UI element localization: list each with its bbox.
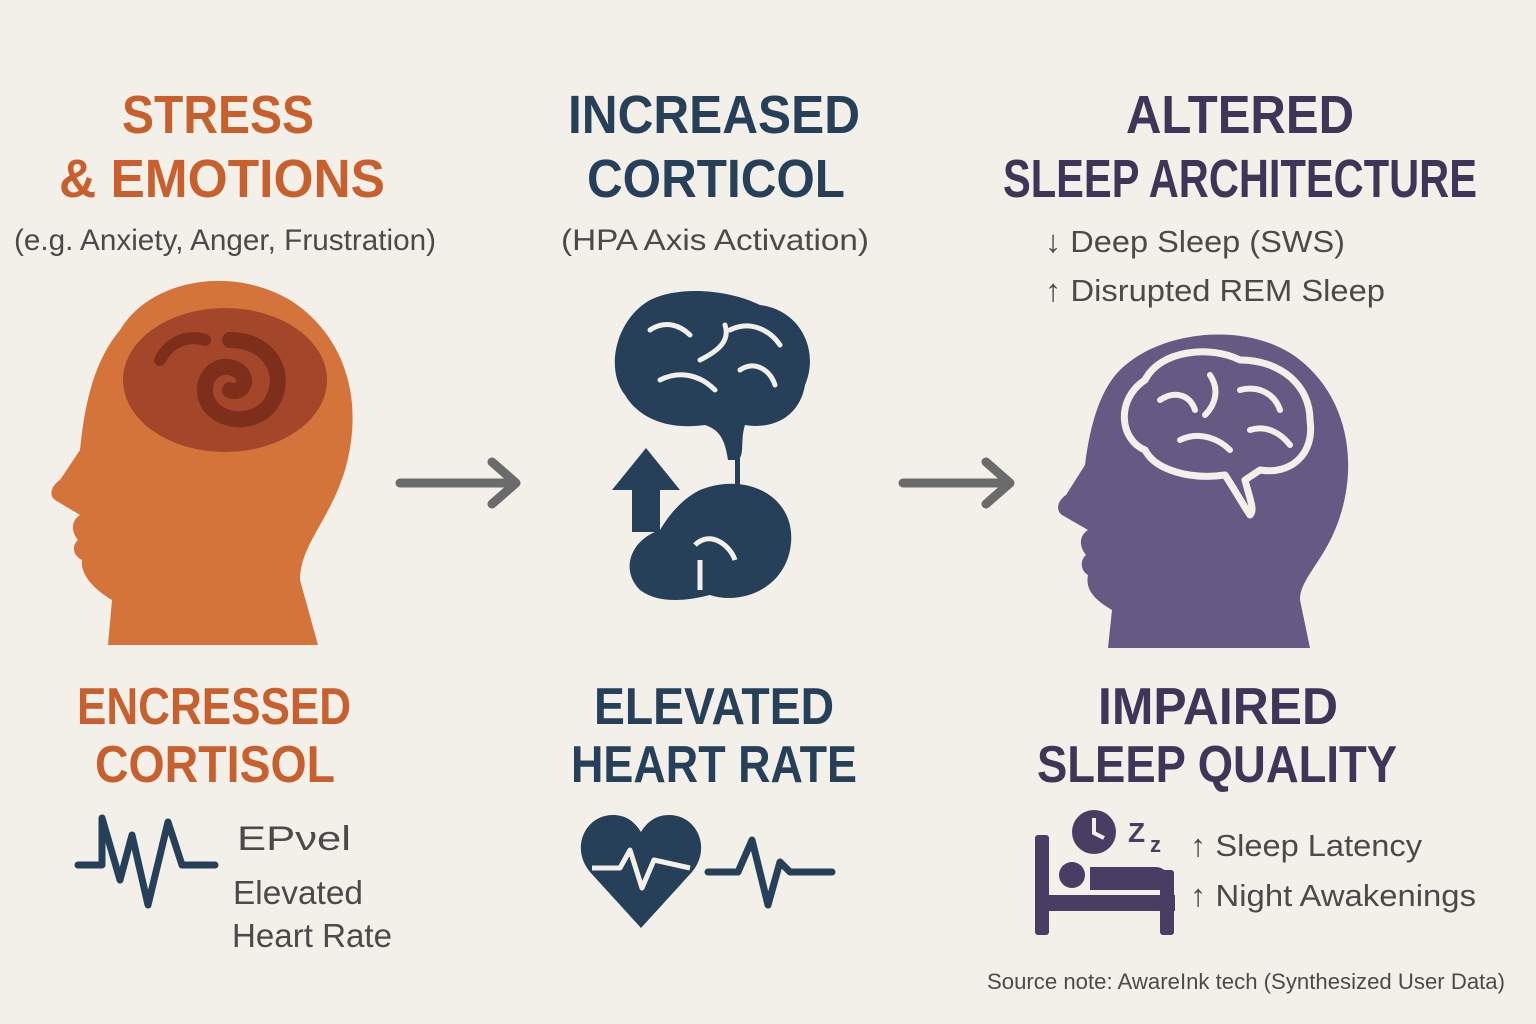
title: altered sleep architecture <box>1003 85 1477 308</box>
icon: bed with clock and Zz: z <box>1150 832 1161 857</box>
title: altered sleep architecture: ALTERED <box>1126 85 1354 145</box>
icon: bed with clock and Zz: Z <box>1128 817 1145 848</box>
heading: encressed cortisol: ENCRESSED <box>77 678 351 736</box>
heading: elevated heart rate: ELEVATED <box>594 678 834 736</box>
heading: elevated heart rate <box>571 678 857 794</box>
heading: elevated heart rate: HEART RATE <box>571 736 857 794</box>
heading: impaired sleep quality: SLEEP QUALITY <box>1037 736 1397 794</box>
heading: encressed cortisol: CORTISOL <box>95 736 335 794</box>
text: elevated heart rate left: Heart Rate <box>232 917 392 954</box>
title: increased corticol <box>561 85 869 257</box>
icon: ECG left <box>78 818 215 905</box>
title: stress & emotions: STRESS <box>122 85 314 145</box>
arrow 1 <box>400 462 516 504</box>
heading: impaired sleep quality: IMPAIRED <box>1098 678 1338 736</box>
text: sleep latency and awakenings <box>1190 828 1476 913</box>
text: elevated heart rate left <box>232 820 392 954</box>
title: stress & emotions <box>14 85 436 257</box>
text: sleep latency and awakenings: ↑ Sleep Latency <box>1190 828 1423 863</box>
title: altered sleep architecture: ↑ Disrupted REM Sleep <box>1045 273 1385 308</box>
heading: encressed cortisol <box>77 678 351 794</box>
icon: heart with ECG <box>581 815 832 928</box>
title: stress & emotions: (e.g. Anxiety, Anger, Frustration) <box>14 224 436 257</box>
title: stress & emotions: & EMOTIONS <box>59 149 385 209</box>
icon: brain, adrenal and up arrow <box>612 291 810 600</box>
source note: Source note: AwareInk tech (Synthesized User Data) <box>987 969 1505 994</box>
text: elevated heart rate left: EPνel <box>237 820 351 858</box>
icon: orange head <box>51 281 353 645</box>
arrow 2 <box>903 462 1010 504</box>
title: altered sleep architecture: ↓ Deep Sleep (SWS) <box>1045 224 1345 259</box>
heading: impaired sleep quality <box>1037 678 1397 794</box>
text: elevated heart rate left: Elevated <box>233 874 363 911</box>
icon: bed with clock and Zz <box>1035 810 1175 935</box>
title: increased corticol: (HPA Axis Activation) <box>561 224 869 257</box>
title: increased corticol: INCREASED <box>568 85 860 145</box>
text: sleep latency and awakenings: ↑ Night Awakenings <box>1190 878 1476 913</box>
title: increased corticol: CORTICOL <box>587 149 845 209</box>
icon: purple head with brain <box>1058 335 1348 648</box>
